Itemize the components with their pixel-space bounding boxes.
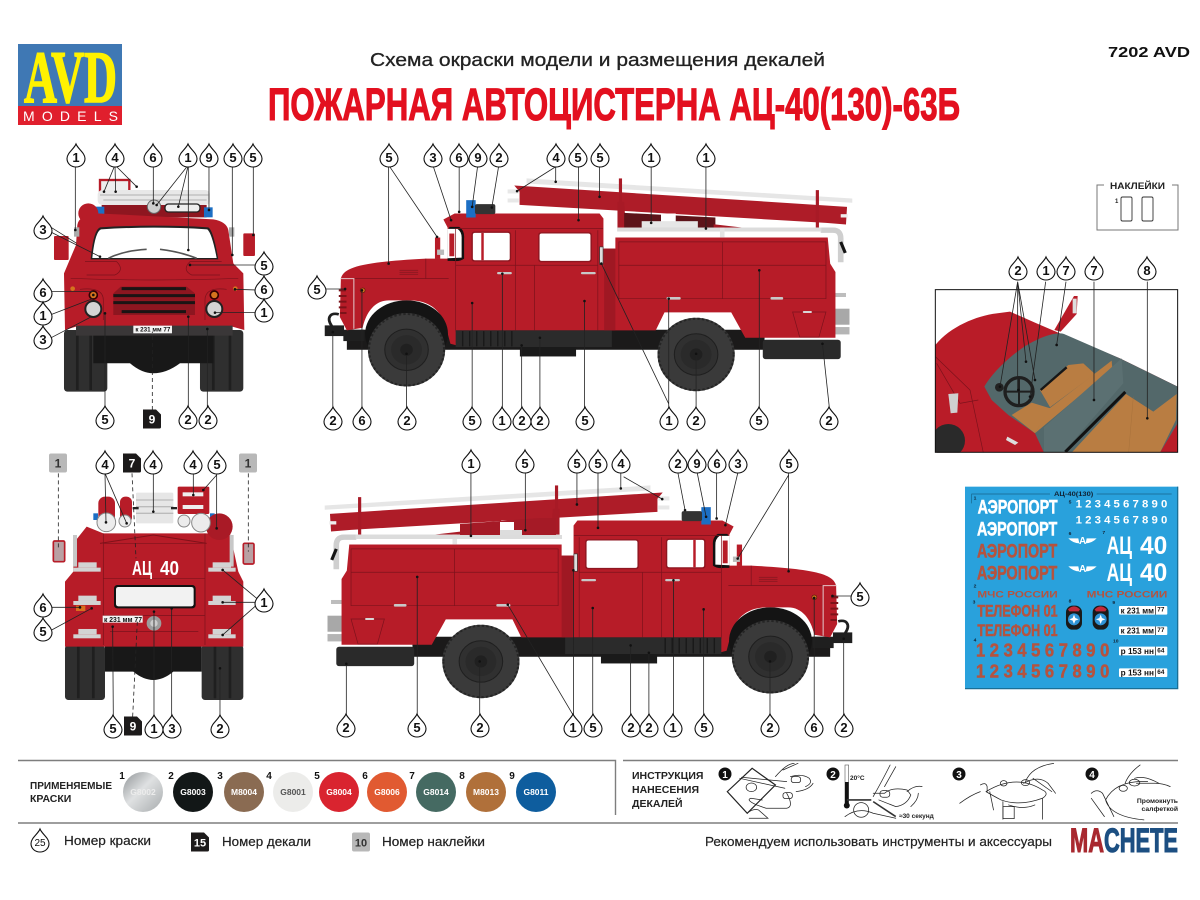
right side paint markers: 5 [413, 720, 421, 735]
panel: paint swatches: 3 [217, 771, 223, 782]
front view truck drawing [54, 180, 255, 392]
panel: stickers box [1097, 180, 1178, 230]
interior leader lines [1000, 282, 1147, 418]
front view paint markers: 9 [205, 150, 213, 165]
left side paint markers: 1 [665, 413, 673, 428]
rear view paint markers: 5 [109, 721, 117, 736]
rear view decal and sticker tags: 1 [55, 456, 62, 470]
panel: paint swatches: G8014 [423, 787, 449, 797]
rear view paint markers: 6 [39, 600, 47, 615]
panel: right side view [325, 450, 869, 737]
panel: decal sheet: А [1079, 564, 1086, 575]
rear view paint markers: 1 [150, 721, 158, 736]
panel: paint swatches: 4 [266, 771, 272, 782]
panel: left side view [308, 144, 852, 430]
right side paint markers: 5 [594, 456, 602, 471]
step 4: blot with tissue [1086, 765, 1178, 820]
panel: paint swatches: 1 [119, 771, 125, 782]
left side paint markers: 9 [474, 150, 482, 165]
legend: sticker number: 10 [355, 838, 367, 850]
panel: decal sheet: 77 [1157, 627, 1165, 634]
step 2: soak decal in water [826, 765, 934, 820]
rear number plate: к 231 мм 77 [104, 617, 142, 624]
interior drawing [932, 290, 1178, 457]
left side truck drawing [325, 178, 852, 391]
panel: cab interior view [932, 257, 1178, 457]
panel: paint swatches: M8013 [473, 787, 499, 797]
right side paint markers: 2 [476, 720, 484, 735]
panel: decal sheet: 1 2 3 4 5 6 7 8 9 0 [1076, 499, 1167, 511]
rear view paint markers: 4 [189, 457, 197, 472]
right side paint markers: 1 [569, 720, 577, 735]
rear view decal and sticker tags: 1 [245, 456, 252, 470]
right side leader lines [346, 473, 852, 717]
front view truck drawing: к 231 мм 77 [135, 327, 171, 334]
recommendation text: Рекомендуем использовать инструменты и аксессуары [705, 834, 1052, 849]
panel: decal sheet: А [1079, 536, 1086, 547]
left side paint markers: 1 [647, 150, 655, 165]
right side paint markers: 5 [521, 456, 529, 471]
panel: decal sheet: АЦ [1107, 532, 1132, 560]
left side paint markers: 3 [429, 150, 437, 165]
panel: paint swatches: G8006 [374, 787, 400, 797]
step 4: blot with tissue: Промокнуть [1137, 798, 1178, 805]
right side paint markers: 9 [693, 456, 701, 471]
panel: decal sheet: 40 [1140, 532, 1167, 560]
right side paint markers: 3 [734, 456, 742, 471]
panel: stickers box: 1 [1115, 199, 1119, 205]
right side paint markers: 5 [573, 456, 581, 471]
front view paint markers [34, 144, 273, 429]
step 3: place decal [952, 763, 1056, 819]
left side paint markers: 1 [702, 150, 710, 165]
legend: decal number: Номер декали [222, 835, 311, 849]
instruction heading: НАНЕСЕНИЯ [632, 784, 699, 796]
panel: paint swatches: M8004 [231, 787, 257, 797]
step 2: soak decal in water: 2 [830, 770, 836, 781]
panel: decal sheet: к 231 мм [1121, 627, 1154, 636]
right side paint markers [337, 450, 869, 737]
step 3: place decal: 3 [956, 770, 962, 781]
left side paint markers [308, 144, 838, 430]
front view paint markers: 5 [260, 258, 268, 273]
right side paint markers: 2 [342, 720, 350, 735]
front view paint markers: 2 [184, 412, 192, 427]
panel: paint swatches: G8003 [180, 787, 206, 797]
front view paint markers: 6 [149, 150, 157, 165]
rear view truck drawing [53, 487, 254, 700]
left side paint markers: 5 [468, 413, 476, 428]
panel: decal sheet: 1 [974, 495, 977, 501]
logo: AVD Models: MODELS [23, 108, 118, 124]
right side paint markers: 1 [669, 720, 677, 735]
panel: decal sheet: к 231 мм [1121, 606, 1154, 615]
panel: decal sheet: р 153 нн [1121, 647, 1154, 656]
panel: decal sheet: 40 [1140, 559, 1167, 587]
step 2: soak decal in water: ≈30 секунд [899, 813, 934, 820]
panel: decal sheet: ТЕЛЕФОН 01 [977, 602, 1058, 621]
panel: decal sheet: АЭРОПОРТ [978, 497, 1058, 518]
right side paint markers: 5 [785, 456, 793, 471]
panel: decal sheet: МЧС РОССИИ [977, 589, 1058, 599]
left side paint markers: 5 [596, 150, 604, 165]
right side paint markers: 2 [674, 456, 682, 471]
rear view paint markers: 5 [213, 457, 221, 472]
left side paint markers: 2 [825, 413, 833, 428]
rear view paint markers: 4 [149, 457, 157, 472]
front view paint markers: 1 [184, 150, 192, 165]
decal tag 9 [143, 410, 161, 428]
front view paint markers: 2 [204, 412, 212, 427]
panel: paint swatches: 6 [362, 771, 368, 782]
panel: decal sheet: 2 [974, 583, 977, 589]
right side paint markers: 2 [627, 720, 635, 735]
right side paint markers: 5 [589, 720, 597, 735]
left side paint markers: 6 [358, 413, 366, 428]
panel: decal sheet: 64 [1157, 647, 1165, 654]
right side paint markers: 2 [840, 720, 848, 735]
left side leader lines [324, 165, 829, 409]
front view paint markers: 5 [249, 150, 257, 165]
front view paint markers: 3 [39, 332, 47, 347]
right side truck drawing [325, 485, 852, 698]
panel: decal sheet: АЭРОПОРТ [977, 542, 1057, 563]
legend: sticker number [352, 832, 485, 852]
rear view paint markers: 1 [260, 595, 268, 610]
panel: decal sheet: 4 [974, 638, 977, 644]
step 1: cut decal [718, 763, 813, 818]
rear view paint markers [34, 451, 273, 738]
rear view paint markers: 4 [101, 457, 109, 472]
front view paint markers: 5 [229, 150, 237, 165]
panel: decal sheet: 6 [1069, 531, 1072, 537]
interior paint markers: 2 [1014, 263, 1022, 278]
left side paint markers: 5 [313, 282, 321, 297]
panel: decal instructions [718, 763, 1178, 820]
front view paint markers: 6 [39, 285, 47, 300]
paints heading: КРАСКИ [30, 793, 71, 805]
step 1: cut decal: 1 [722, 770, 728, 781]
panel: paint swatches: G8011 [523, 787, 549, 797]
left side paint markers: 6 [455, 150, 463, 165]
paints heading [30, 780, 112, 805]
logo: AVD Models: AVD [24, 37, 117, 119]
panel: paint swatches: G8001 [280, 787, 306, 797]
front view paint markers: 3 [39, 222, 47, 237]
panel: decal sheet: 7 [1102, 530, 1105, 536]
right side paint markers: 1 [467, 456, 475, 471]
panel: front view [34, 144, 273, 429]
front view paint markers: 1 [39, 308, 47, 323]
panel: decal sheet: 5 [1069, 499, 1072, 505]
panel: decal sheet: АЭРОПОРТ [977, 519, 1057, 540]
left side paint markers: 4 [552, 150, 560, 165]
front view leader lines [50, 165, 257, 410]
panel: decal sheet: 1 2 3 4 5 6 7 8 9 0 [976, 640, 1109, 661]
instruction heading: ДЕКАЛЕЙ [632, 797, 683, 810]
rear view decal and sticker tags [49, 454, 257, 736]
step 2: soak decal in water: 20°C [850, 774, 865, 782]
panel: paint swatches [119, 771, 556, 812]
rear view paint markers: 2 [216, 721, 224, 736]
panel: decal sheet: 1 2 3 4 5 6 7 8 9 0 [976, 660, 1109, 681]
rear view decal and sticker tags: 7 [129, 456, 136, 470]
left side paint markers: 2 [518, 413, 526, 428]
interior paint markers: 7 [1062, 263, 1070, 278]
front view paint markers: 1 [260, 305, 268, 320]
rear view paint markers: 5 [39, 624, 47, 639]
interior paint markers [1009, 257, 1156, 280]
right side paint markers: 4 [617, 456, 625, 471]
left side paint markers: 2 [495, 150, 503, 165]
front view paint markers: 6 [260, 282, 268, 297]
paints heading: ПРИМЕНЯЕМЫЕ [30, 780, 112, 792]
right side paint markers: 6 [810, 720, 818, 735]
left side paint markers: 2 [536, 413, 544, 428]
legend: paint number: Номер краски [64, 834, 151, 848]
panel: decal sheet [965, 487, 1178, 689]
panel: decal sheet: 64 [1157, 669, 1165, 676]
panel: decal sheet: 10 [1113, 639, 1119, 645]
left side paint markers: 5 [574, 150, 582, 165]
decal tag 9: 9 [149, 412, 156, 426]
panel: rear view [34, 451, 273, 738]
panel: paint swatches: G8004 [326, 787, 352, 797]
panel: paint swatches: 9 [509, 771, 515, 782]
panel: decal sheet: 77 [1157, 607, 1165, 614]
right side paint markers: 5 [700, 720, 708, 735]
step 4: blot with tissue: салфеткой [1142, 805, 1178, 813]
panel: stickers box: НАКЛЕЙКИ [1110, 180, 1165, 192]
right side paint markers: 6 [713, 456, 721, 471]
rear view decal and sticker tags: 9 [130, 720, 137, 734]
logo: AVD Models [18, 37, 122, 125]
legend: paint number: 25 [34, 838, 46, 849]
left side paint markers: 2 [329, 413, 337, 428]
left side paint markers: 2 [403, 413, 411, 428]
interior paint markers: 1 [1042, 263, 1050, 278]
panel: paint swatches: 7 [409, 771, 415, 782]
panel: decal sheet: 3 [973, 599, 976, 605]
rear inscription АЦ 40: АЦ [132, 558, 152, 580]
legend: decal number: 15 [194, 838, 206, 850]
panel: decal sheet: р 153 нн [1121, 669, 1154, 678]
instruction heading: ИНСТРУКЦИЯ [632, 770, 703, 782]
front view paint markers: 1 [72, 150, 80, 165]
panel: decal sheet: АЦ-40(130) [1054, 491, 1093, 498]
front view paint markers: 4 [111, 150, 119, 165]
article number: 7202 AVD [1108, 44, 1190, 61]
rear inscription АЦ 40 [132, 558, 179, 580]
left side paint markers: 5 [385, 150, 393, 165]
panel: paint swatches: 2 [168, 771, 174, 782]
panel: paint swatches: 8 [459, 771, 465, 782]
front view paint markers: 5 [101, 412, 109, 427]
subtitle: Схема окраски модели и размещения декалей [370, 50, 825, 70]
interior paint markers: 8 [1143, 263, 1151, 278]
panel: decal sheet: АЭРОПОРТ [977, 564, 1057, 585]
left side paint markers: 5 [755, 413, 763, 428]
rear inscription АЦ 40: 40 [160, 558, 179, 580]
right side paint markers: 2 [645, 720, 653, 735]
legend: paint number [31, 829, 151, 852]
step 4: blot with tissue: 4 [1089, 770, 1095, 781]
panel: paint swatches: 5 [314, 771, 320, 782]
panel: decal sheet: 8 [1069, 598, 1072, 604]
panel: paint swatches: G8002 [130, 787, 156, 797]
left side paint markers: 1 [498, 413, 506, 428]
legend: sticker number: Номер наклейки [382, 835, 485, 849]
panel: decal sheet: 9 [1112, 600, 1115, 606]
legend: decal number [191, 832, 311, 852]
rear view leader lines [52, 473, 257, 718]
interior paint markers: 7 [1090, 263, 1098, 278]
rear view paint markers: 3 [168, 721, 176, 736]
panel: decal sheet: 1 2 3 4 5 6 7 8 9 0 [1076, 515, 1167, 527]
right side paint markers: 2 [766, 720, 774, 735]
panel: decal sheet: АЦ [1107, 559, 1132, 587]
section dividers [18, 760, 1178, 823]
right side paint markers: 5 [856, 589, 864, 604]
left side paint markers: 5 [581, 413, 589, 428]
panel: decal sheet: МЧС РОССИИ [1087, 589, 1168, 599]
left side paint markers: 2 [692, 413, 700, 428]
panel: decal sheet: ТЕЛЕФОН 01 [977, 621, 1058, 640]
